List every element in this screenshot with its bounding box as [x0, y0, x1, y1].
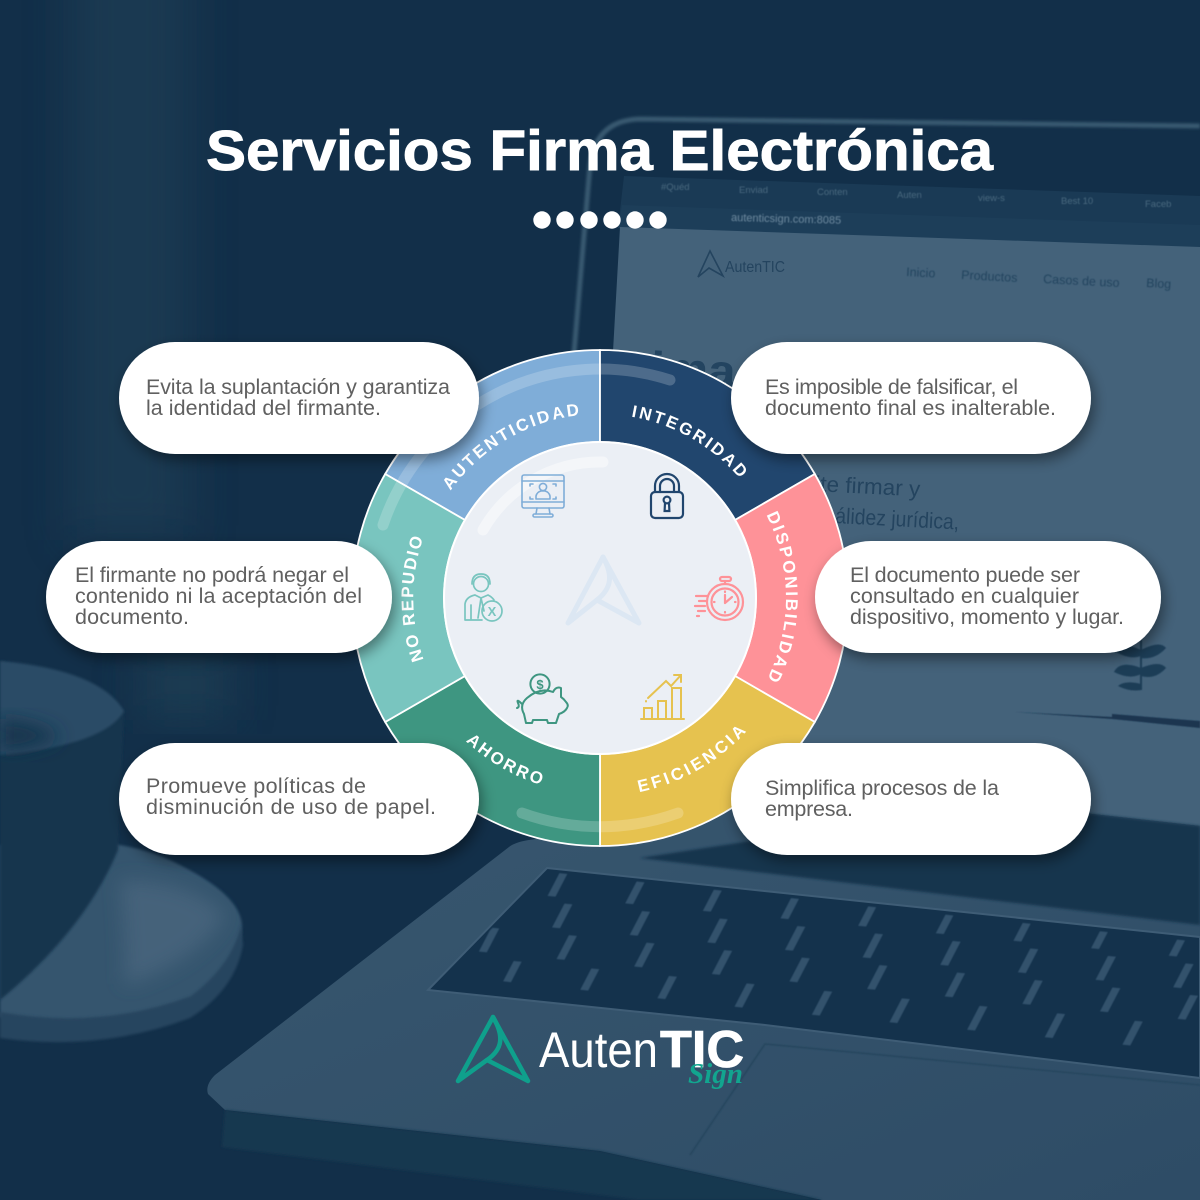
pill: disponibilidad description: El documento puede ser — [850, 563, 1080, 587]
icon: padlock — [651, 474, 683, 518]
pill: eficiencia description: Simplifica procesos de la — [765, 776, 999, 800]
pill: autenticidad description: la identidad del firmante. — [146, 396, 381, 420]
pill: integridad description — [731, 342, 1091, 454]
laptop screen — [590, 227, 1200, 826]
disc highlight — [483, 462, 603, 530]
segment labels: AUTENTICIDAD — [444, 404, 578, 490]
browser and website text: #Quéd — [661, 182, 690, 193]
laptop body — [207, 787, 1200, 1200]
icon: monitor — [522, 475, 564, 517]
logo mark — [458, 1017, 528, 1081]
segment: integridad — [600, 350, 815, 520]
laptop front edge — [222, 1110, 822, 1200]
pill: no repudio description: El firmante no podrá negar el — [75, 563, 349, 587]
pill: no repudio description: contenido ni la aceptación del — [75, 584, 362, 608]
segment: ahorro — [385, 676, 600, 846]
pill: no repudio description: documento. — [75, 605, 189, 629]
logo wordmark: Auten — [539, 1022, 658, 1078]
logo tagline: Sign — [688, 1058, 743, 1090]
center disc — [444, 442, 756, 754]
pill: ahorro description: disminución de uso de papel. — [146, 795, 436, 819]
browser and website text: Best 10 — [1061, 196, 1093, 207]
browser and website text: autenticsign.com:8085 — [731, 212, 841, 227]
icon: person with x — [465, 574, 502, 621]
pill: disponibilidad description: dispositivo, momento y lugar. — [850, 605, 1124, 629]
url bar — [618, 205, 1200, 248]
AutenTIC Sign logo — [458, 1017, 744, 1090]
segment: disponibilidad — [735, 474, 848, 722]
browser and website text: Productos — [961, 268, 1018, 285]
segment labels: NO REPUDIO — [402, 536, 424, 662]
segment labels: EFICIENCIA — [638, 726, 746, 792]
icon: piggy bank: $ — [536, 677, 544, 692]
pill: integridad description: documento final es inalterable. — [765, 396, 1056, 420]
ring highlight top — [383, 369, 670, 525]
browser and website text: AutenTIC — [725, 259, 785, 276]
dark hinge area — [640, 787, 1200, 925]
pill: autenticidad description: Evita la suplantación y garantiza — [146, 375, 450, 399]
segment: autenticidad — [385, 350, 600, 520]
laptop lid highlight — [570, 119, 1200, 400]
browser and website text: Auten — [897, 190, 922, 201]
browser and website text: Casos de uso — [1043, 272, 1120, 290]
pill: integridad description: Es imposible de falsificar, el — [765, 375, 1018, 399]
pill: ahorro description: Promueve políticas de — [146, 774, 366, 798]
browser bar — [618, 176, 1200, 248]
saucer reflection — [120, 880, 225, 985]
blurred background glow — [140, 650, 230, 720]
browser and website text: Conten — [817, 187, 848, 198]
blurred background band — [70, 0, 190, 540]
browser and website text: Enviad — [739, 185, 768, 196]
segment labels: DISPONIBILIDAD — [766, 510, 798, 682]
segment labels: INTEGRIDAD — [632, 405, 746, 476]
pill: disponibilidad description — [815, 541, 1161, 653]
icon: growth chart — [641, 675, 684, 719]
saucer — [0, 840, 242, 1026]
touchpad — [690, 1044, 1200, 1155]
browser and website text: view-s — [978, 193, 1005, 204]
title: Servicios Firma Electrónica — [206, 119, 994, 183]
pill: eficiencia description: empresa. — [765, 797, 853, 821]
segment labels: AHORRO — [466, 735, 542, 784]
segment labels — [402, 404, 798, 792]
wheel diagram — [356, 349, 844, 847]
pill: ahorro description — [119, 743, 479, 855]
coffee cup — [0, 661, 124, 1000]
icon: person with x: X — [488, 604, 497, 619]
icon: stopwatch — [695, 577, 743, 620]
cup rim — [0, 661, 124, 755]
browser and website text: álidez jurídica, — [835, 503, 960, 534]
segment: no repudio — [352, 474, 465, 722]
browser and website text: Faceb — [1145, 199, 1171, 210]
icon: piggy bank — [517, 674, 568, 723]
segment: eficiencia — [600, 676, 815, 846]
watermark logo — [568, 557, 639, 623]
browser and website text — [649, 182, 1172, 534]
title dots — [533, 211, 667, 229]
browser and website text: ima — [649, 343, 738, 396]
browser and website text: ite firmar y — [815, 471, 921, 501]
AutenTIC Sign logo: TIC — [660, 1021, 744, 1079]
pill: autenticidad description — [119, 342, 479, 454]
plant on screen — [1015, 640, 1200, 728]
ring highlight bottom — [522, 813, 678, 827]
pill: disponibilidad description: consultado en cualquier — [850, 584, 1079, 608]
browser and website text: Inicio — [906, 265, 936, 281]
browser and website text: Blog — [1146, 276, 1172, 291]
pill: eficiencia description — [731, 743, 1091, 855]
pill: no repudio description — [46, 541, 392, 653]
key gaps — [445, 872, 1200, 1056]
keyboard — [428, 868, 1200, 1078]
